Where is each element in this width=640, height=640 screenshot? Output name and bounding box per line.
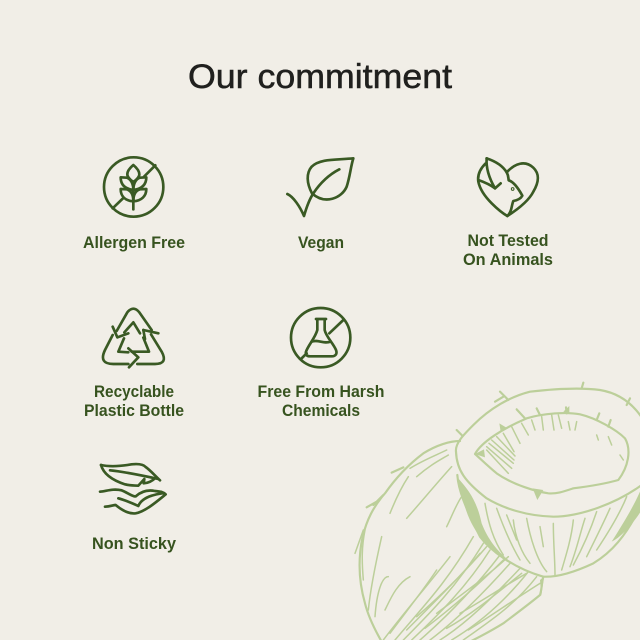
shading: coconut hatch lines	[355, 415, 627, 640]
item: vegan	[287, 158, 353, 252]
shading: coconut dark hatch and spikes	[366, 406, 640, 596]
label: Vegan	[298, 234, 344, 252]
icon: crossed-out flask	[291, 308, 350, 367]
icon: rabbit in heart	[478, 158, 538, 216]
icon: leaf check	[287, 158, 353, 216]
item: not tested on animals	[463, 158, 553, 269]
item: free from harsh chemicals: Chemicals	[282, 402, 360, 420]
item: allergen free	[83, 157, 185, 252]
icon: recycling triangle	[103, 309, 164, 367]
item: non sticky	[92, 464, 177, 553]
item: recyclable plastic bottle: Plastic Bottle	[84, 402, 184, 420]
icon: feather over hand	[100, 464, 166, 513]
label: Recyclable	[94, 383, 174, 401]
label: Non Sticky	[92, 535, 177, 553]
item: not tested on animals: On Animals	[463, 251, 553, 269]
item: recyclable plastic bottle	[84, 309, 184, 420]
item: free from harsh chemicals	[258, 308, 384, 420]
label: Allergen Free	[83, 234, 185, 252]
label: Not Tested	[468, 232, 548, 250]
title: Our commitment	[188, 58, 453, 96]
icon: crossed-out wheat	[104, 157, 163, 217]
illustration: coconut	[355, 383, 640, 640]
label: Free From Harsh	[258, 383, 384, 401]
